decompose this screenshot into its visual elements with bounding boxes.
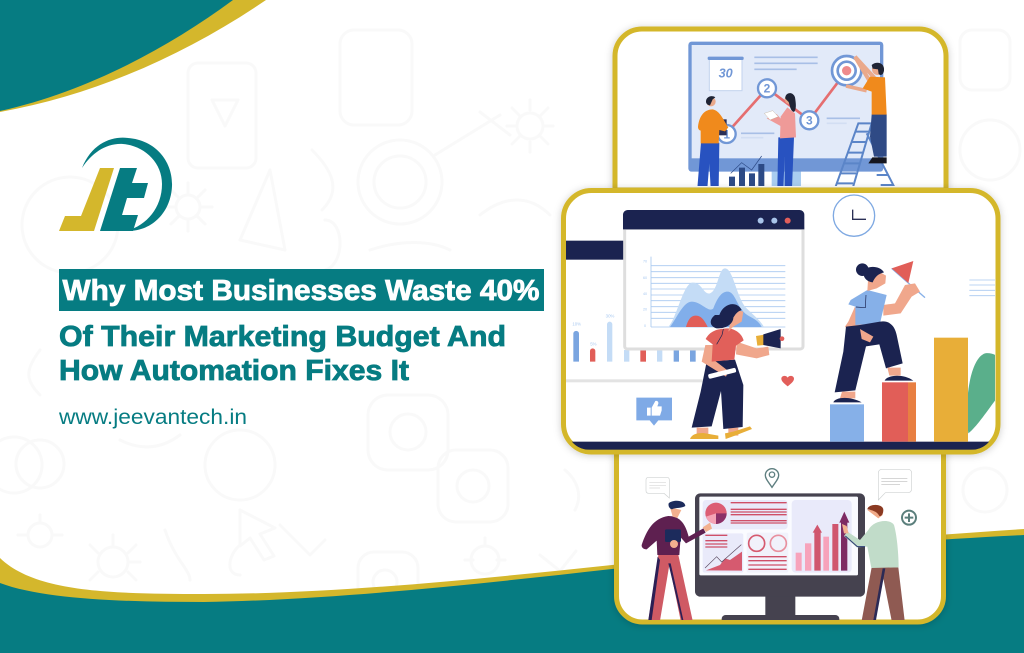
- thumbs up icon: [636, 398, 672, 426]
- browser window with area chart: 60: [643, 276, 647, 280]
- man in purple sweater: [642, 501, 712, 621]
- bottom teal and gold wave: [0, 529, 1024, 653]
- map pin icon: [765, 469, 779, 487]
- floor lines: [566, 241, 1024, 450]
- browser window with area chart: 40: [643, 292, 647, 296]
- rounded bar chart: 5%: [590, 342, 597, 347]
- step blocks and leaf: [830, 280, 997, 442]
- woman with megaphone: [690, 304, 784, 439]
- title second line: Of Their Marketing Budget And: [59, 321, 506, 353]
- title third line: How Automation Fixes It: [59, 355, 410, 387]
- person on ladder: [846, 57, 887, 163]
- monitor with roadmap: [688, 42, 883, 190]
- woman raising a flag: [833, 261, 925, 402]
- monitor with dashboard: [695, 493, 865, 625]
- rounded bar chart: 30%: [606, 314, 614, 319]
- right speech bubble: [878, 469, 912, 500]
- ladder: [835, 123, 895, 188]
- panel: bottom card dashboard illustration: [616, 440, 944, 625]
- heart icon: [781, 376, 794, 386]
- browser window with area chart: [623, 210, 804, 349]
- logo: JT monogram: [59, 138, 172, 231]
- top-left teal and gold wave: [0, 0, 266, 112]
- rounded bar chart: [572, 314, 696, 362]
- browser window with area chart: 70: [643, 259, 647, 263]
- monitor with roadmap: 2: [764, 82, 771, 96]
- monitor with roadmap: 30: [719, 66, 733, 80]
- left speech bubble: [646, 477, 669, 498]
- person with orange shirt: [697, 96, 728, 188]
- website url: www.jeevantech.in: [58, 406, 247, 429]
- clock icon: [833, 195, 875, 236]
- panel: middle card marketing illustration: [564, 190, 1024, 452]
- panel: top card roadmap illustration: [615, 29, 946, 190]
- man in pale green shirt: [842, 505, 905, 621]
- browser window with area chart: 20: [643, 308, 647, 312]
- monitor with roadmap: 1: [723, 128, 730, 142]
- rounded bar chart: 10%: [572, 322, 581, 327]
- small bar chart: [729, 156, 764, 188]
- title highlight bar: Why Most Businesses Waste 40%: [62, 275, 540, 307]
- plus icon: [902, 511, 916, 525]
- browser window with area chart: 0: [644, 324, 646, 328]
- woman with pink shirt: [764, 93, 796, 188]
- monitor with roadmap: 3: [806, 114, 813, 128]
